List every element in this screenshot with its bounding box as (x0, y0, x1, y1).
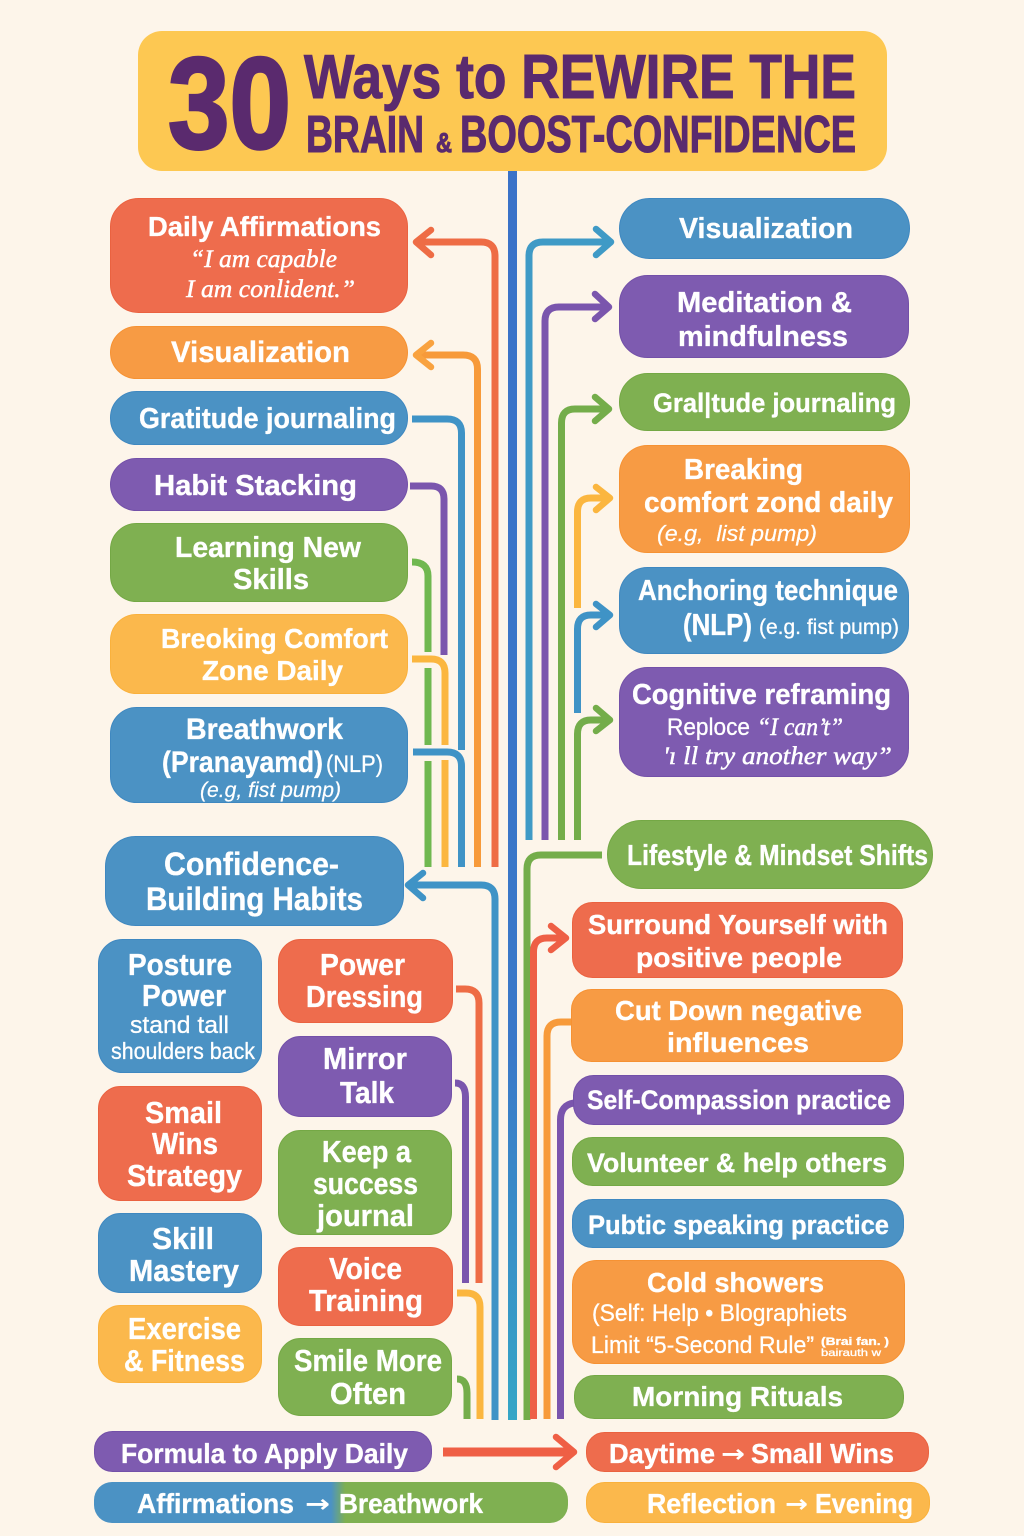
lifestyle and lower connectors (527, 855, 602, 1420)
panel: cold showers: Cold showers (647, 1267, 824, 1298)
panel: daily affirmations (110, 198, 408, 312)
title line 2: & (436, 127, 452, 158)
panel: breathwork: (NLP) (326, 751, 383, 778)
panel: affirmations to breathwork (94, 1482, 568, 1523)
panel: daytime small wins: Small Wins (751, 1438, 894, 1469)
panel: breaking comfort zone (110, 614, 408, 694)
panel: small wins strategy: Smail (145, 1095, 222, 1130)
panel: breaking comfort zone: Zone Daily (202, 655, 343, 686)
arrow: formula to daytime (443, 1437, 574, 1467)
panel: affirmations to breathwork: Affirmations (137, 1488, 294, 1519)
panel: cognitive reframing (620, 668, 908, 776)
panel: skill mastery: Skill (152, 1221, 214, 1256)
panel: meditation and mindfulness: Meditation & (677, 287, 852, 319)
panel: power dressing (278, 940, 452, 1022)
central spine line (508, 171, 517, 1420)
panel: voice training: Training (309, 1283, 423, 1318)
panel: reflection evening: Evening (815, 1488, 913, 1519)
panel: power dressing: Power (320, 947, 405, 982)
panel: small wins strategy: Strategy (127, 1158, 243, 1193)
panel: formula heading: Formula to Apply Daily (121, 1438, 408, 1469)
title banner (138, 30, 887, 176)
panel: morning rituals (574, 1376, 904, 1418)
panel: visualization left (110, 326, 408, 378)
panel: exercise and fitness: Exercise (128, 1311, 241, 1346)
confidence connectors (408, 873, 495, 1420)
panel: mirror talk: Talk (340, 1075, 395, 1110)
panel: daytime small wins: → (721, 1440, 745, 1468)
panel: posture power: Posture (128, 947, 232, 982)
panel: volunteer (572, 1138, 904, 1186)
panel: volunteer: Volunteer & help others (587, 1148, 887, 1178)
panel: mirror talk: Mirror (323, 1041, 407, 1076)
panel: confidence-building habits (106, 836, 404, 926)
panel: gratitude journaling right: Gral|tude journaling (653, 388, 896, 418)
panel: breathwork: (Pranayamd) (162, 746, 323, 779)
panel: self-compassion (574, 1076, 904, 1124)
panel: habit stacking (110, 458, 408, 510)
panel: cognitive reframing: “I can’t” (757, 714, 843, 741)
panel: lifestyle and mindset shifts: Lifestyle & Mindset Shifts (627, 840, 928, 872)
panel: learning new skills (110, 524, 408, 602)
panel: breathwork (110, 708, 408, 802)
panel: small wins strategy (98, 1086, 262, 1200)
panel: exercise and fitness (98, 1306, 262, 1382)
title line 2: BOOST-CONFIDENCE (460, 106, 856, 164)
panel: affirmations to breathwork: → (305, 1490, 330, 1518)
panel: cold showers: (Brai fan. ) (821, 1336, 889, 1348)
panel: cognitive reframing: Cognitive reframing (632, 679, 891, 711)
panel: meditation and mindfulness: mindfulness (678, 321, 848, 353)
panel: confidence-building habits: Building Habits (146, 881, 363, 917)
panel: visualization right (620, 198, 910, 258)
panel: success journal: journal (316, 1198, 414, 1233)
panel: learning new skills: Learning New (175, 532, 361, 564)
panel: gratitude journaling right (620, 374, 910, 430)
panel: morning rituals: Morning Rituals (632, 1381, 843, 1412)
panel: anchoring technique: (e.g. fist pump) (759, 616, 899, 639)
panel: surround yourself: positive people (636, 942, 842, 973)
panel: posture power: Power (142, 978, 226, 1013)
panel: smile more often (278, 1338, 452, 1416)
panel: breaking comfort zone: Breoking Comfort (161, 623, 388, 654)
panel: reflection evening (586, 1482, 930, 1522)
panel: voice training: Voice (329, 1251, 402, 1286)
panel: daily affirmations: “I am capable (190, 246, 337, 273)
panel: breaking comfort zone daily (620, 446, 910, 552)
panel: daytime small wins: Daytime (609, 1438, 715, 1469)
panel: public speaking: Pubtic speaking practice (588, 1210, 889, 1240)
panel: cut down negative influences: influences (667, 1027, 809, 1058)
title number: 30 (168, 30, 291, 176)
panel: mirror talk (278, 1036, 452, 1116)
panel: gratitude journaling (110, 392, 408, 444)
panel: anchoring technique: (NLP) (683, 607, 752, 642)
panel: surround yourself (572, 902, 902, 978)
panel: cold showers: Limit “5-Second Rule” (591, 1332, 814, 1359)
panel: smile more often: Often (330, 1376, 406, 1411)
panel: breaking comfort zone daily: Breaking (684, 454, 803, 486)
panel: posture power (98, 940, 262, 1072)
title line 1: Ways to REWIRE THE (304, 43, 856, 112)
left connector arrows (410, 230, 495, 867)
panel: posture power: shoulders back (111, 1038, 255, 1064)
panel: cognitive reframing: Reploce (667, 714, 750, 741)
panel: confidence-building habits: Confidence- (164, 846, 339, 882)
panel: breaking comfort zone daily: comfort zond daily (644, 487, 893, 519)
panel: habit stacking: Habit Stacking (154, 470, 357, 502)
panel: learning new skills: Skills (233, 564, 309, 596)
panel: public speaking (572, 1200, 904, 1248)
panel: daytime small wins (586, 1432, 928, 1472)
panel: cold showers: bairauth w (821, 1348, 882, 1359)
panel: surround yourself: Surround Yourself with (588, 909, 888, 940)
panel: meditation and mindfulness (620, 276, 908, 358)
panel: cut down negative influences (572, 990, 902, 1062)
panel: self-compassion: Self-Compassion practice (587, 1085, 891, 1115)
panel: affirmations to breathwork: Breathwork (339, 1488, 483, 1519)
panel: smile more often: Smile More (294, 1343, 442, 1378)
panel: skill mastery: Mastery (129, 1253, 240, 1288)
panel: anchoring technique: Anchoring technique (638, 575, 898, 607)
panel: power dressing: Dressing (306, 979, 423, 1014)
panel: success journal: success (313, 1166, 418, 1201)
panel: exercise and fitness: & Fitness (124, 1343, 245, 1378)
panel: reflection evening: → (785, 1490, 808, 1518)
panel: voice training (278, 1248, 452, 1326)
panel: breathwork: (e.g, fist pump) (200, 779, 341, 802)
panel: skill mastery (98, 1214, 262, 1292)
panel: reflection evening: Reflection (647, 1488, 776, 1519)
panel: anchoring technique (620, 568, 908, 654)
panel: breaking comfort zone daily: (e.g, list pump) (657, 521, 817, 546)
panel: breathwork: Breathwork (186, 713, 343, 746)
panel: cognitive reframing: 'ı ll try another way” (663, 743, 892, 770)
panel: cold showers: (Self: Help • Blographiets (592, 1300, 847, 1327)
panel: success journal (278, 1130, 452, 1234)
panel: posture power: stand tall (130, 1012, 229, 1039)
panel: visualization right: Visualization (679, 213, 853, 245)
right connector arrows (529, 229, 611, 840)
panel: lifestyle and mindset shifts (608, 820, 932, 888)
panel: success journal: Keep a (322, 1134, 412, 1169)
panel: gratitude journaling: Gratitude journaling (139, 403, 396, 435)
panel: cold showers (572, 1260, 904, 1364)
panel: cut down negative influences: Cut Down negative (615, 995, 862, 1026)
panel: daily affirmations: I am conlident.” (185, 276, 355, 303)
panel: daily affirmations: Daily Affirmations (148, 211, 381, 242)
panel: visualization left: Visualization (171, 336, 350, 369)
title line 2 (306, 106, 856, 164)
panel: formula heading (94, 1432, 432, 1472)
panel: small wins strategy: Wins (152, 1126, 218, 1161)
title line 2: BRAIN (306, 106, 424, 164)
